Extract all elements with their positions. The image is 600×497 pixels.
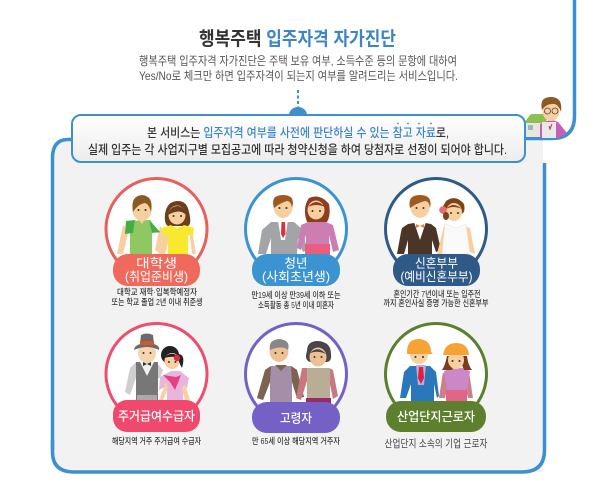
- card: 청년: [246, 178, 346, 310]
- description text: [139, 53, 458, 83]
- icon: student couple: [104, 177, 208, 261]
- caption: 만 65세 이상 해당지역 거주자: [252, 435, 340, 446]
- icon: guide character with house: [524, 97, 567, 138]
- callout box: [72, 115, 525, 162]
- top-right frame line: [520, 0, 574, 138]
- label pill: (예비신혼부부): [400, 270, 472, 284]
- label pill: 대학생: [136, 256, 177, 270]
- caption: 해당지역 거주 주거급여 수급자: [112, 435, 201, 446]
- label pill: 주거급여수급자: [118, 410, 195, 424]
- icon: elderly couple: [244, 322, 348, 407]
- description text: 행복주택 입주자격 자가진단은 주택 보유 여부, 소득수준 등의 문항에 대하여: [139, 53, 457, 68]
- caption: 만19세 이상 만39세 이하 또는: [252, 289, 341, 300]
- caption: 소득활동 총 5년 이내 미혼자: [258, 299, 334, 310]
- label pill: 신혼부부: [415, 256, 458, 270]
- label pill: [393, 254, 480, 286]
- label pill: 청년: [284, 256, 308, 270]
- card: 신혼부부: [384, 178, 489, 308]
- icon: young adults couple: [244, 177, 348, 260]
- panel: gray background: [52, 139, 544, 472]
- label pill: (사회초년생): [262, 270, 330, 284]
- label pill: (취업준비생): [125, 270, 188, 284]
- card: 대학생: [106, 178, 207, 307]
- card: 고령자: [246, 324, 346, 446]
- label pill: [113, 254, 200, 286]
- callout text: [88, 126, 507, 157]
- icon: industrial workers: [384, 322, 488, 404]
- callout text: 실제 입주는 각 사업지구별 모집공고에 따라 청약신청을 하여 당첨자로 선정이 되어야 합니다.: [88, 142, 507, 157]
- card: 주거급여수급자: [106, 324, 207, 446]
- caption: 산업단지 소속의 기업 근로자: [384, 437, 488, 450]
- caption: [252, 289, 341, 310]
- label pill: 고령자: [280, 412, 312, 426]
- icon: elder and child: [104, 322, 208, 406]
- caption: 대학교 재학·입복학예정자: [117, 286, 197, 297]
- caption: [112, 286, 203, 307]
- callout text: 본 서비스는 입주자격 여부를 사전에 판단하실 수 있는 참고 자료로,: [147, 126, 449, 140]
- title: 행복주택 입주자격 자가진단: [199, 28, 396, 50]
- caption: [384, 288, 489, 308]
- card: 산업단지근로자: [384, 324, 488, 450]
- icon: newlywed couple: [384, 177, 488, 262]
- description text: Yes/No로 체크만 하면 입주자격이 되는지 여부를 알려드리는 서비스입니다.: [139, 69, 458, 83]
- caption: 혼인기간 7년이내 또는 입주전: [394, 288, 481, 299]
- caption: 또는 학교 졸업 2년 이내 취준생: [112, 296, 203, 307]
- label pill: [252, 254, 340, 286]
- label pill: 산업단지근로자: [397, 410, 475, 424]
- connector: dashed line and dot: [289, 90, 307, 115]
- emphasis dots: [397, 123, 432, 124]
- caption: 까지 혼인사실 증명 가능한 신혼부부: [384, 297, 489, 308]
